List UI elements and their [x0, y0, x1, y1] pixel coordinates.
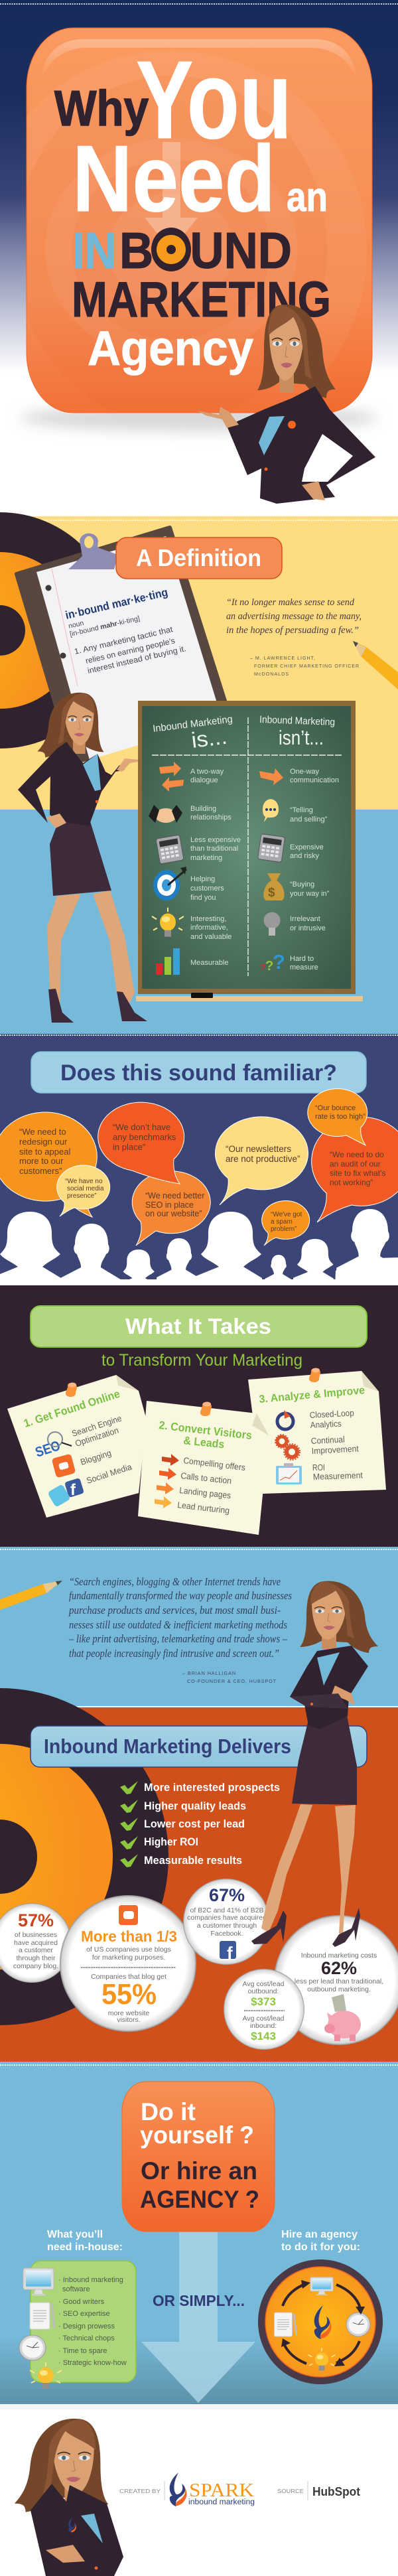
stat circle: more than 1/3 and 55%: for marketing purposes.	[92, 1954, 165, 1962]
attribution	[250, 655, 360, 677]
board list: inbound isn't: One-way	[290, 768, 320, 776]
heading: Does this sound familiar	[31, 1052, 366, 1093]
speech bubble: redesign	[0, 1112, 97, 1217]
speech bubble: benchmarks: any benchmarks	[113, 1132, 176, 1142]
note 1: get found online: Optimization	[74, 1425, 120, 1449]
heading: Does this sound familiar: Does this sound familiar?	[60, 1060, 337, 1086]
definition text: relies on earning people’s	[85, 636, 176, 666]
definition text: noun	[68, 619, 85, 630]
board list: inbound is: customers	[190, 885, 224, 893]
section: delivers background	[0, 1706, 398, 2062]
board list: inbound is: informative,	[190, 924, 228, 932]
board list: inbound isn't: “Telling	[290, 806, 313, 814]
stat circle: 62%: outbound marketing.	[307, 1985, 371, 1993]
title: Need	[72, 126, 275, 232]
character: presenter beside board	[18, 693, 147, 1023]
stat circle: 62%: less per lead than traditional,	[295, 1977, 383, 1985]
note 1: get found online: SEO	[33, 1438, 62, 1461]
decorative target	[0, 1688, 168, 2025]
benefit list: Higher ROI	[144, 1835, 198, 1848]
definition text	[64, 586, 187, 676]
board heading: isn't: isn’t...	[279, 726, 324, 749]
note 2: convert visitors and leads: Compelling offers	[183, 1455, 246, 1472]
stat circle: cost per lead	[224, 1969, 304, 2050]
note 3: analyze and improve: Closed-Loop	[309, 1408, 354, 1420]
board list: inbound isn't: “Buying	[290, 881, 314, 889]
icon: pencil	[353, 641, 398, 689]
heading: hire an agency: to do it for you:	[281, 2242, 360, 2253]
stat circle: cost per lead: Avg cost/lead	[243, 1980, 285, 1988]
benefit list	[120, 1781, 280, 1867]
note 3: analyze and improve: Improvement	[311, 1443, 359, 1456]
note 3: analyze and improve	[248, 1368, 386, 1494]
panel: orange title card	[27, 28, 373, 413]
credit: created by: inbound marketing	[188, 2498, 255, 2506]
speech bubble: redesign: redesign our	[19, 1137, 68, 1147]
note 2: convert visitors and leads: 2. Convert Visitors	[159, 1419, 253, 1442]
title: You	[136, 38, 292, 162]
speech bubble: better SEO: on our website”	[145, 1209, 202, 1218]
panel: do it yourself or hire: yourself ?	[140, 2121, 254, 2149]
quote: Lawrence Light: an advertising message to the many,	[226, 611, 362, 622]
note 1: get found online: f	[70, 1481, 76, 1499]
stat circle: cost per lead: inbound:	[250, 2022, 277, 2030]
board list: inbound is: Measurable	[190, 959, 228, 967]
note 2: convert visitors and leads: Lead nurturing	[177, 1500, 230, 1516]
stat circle: 62%: 62%	[321, 1958, 357, 1978]
speech bubble: audit	[312, 1117, 398, 1222]
stat circle: 67%: Facebook.	[210, 1930, 243, 1938]
definition text: in·bound mar·ke·ting	[64, 586, 169, 622]
note 1: get found online: Search Engine	[70, 1413, 123, 1439]
panel: do it yourself or hire: AGENCY ?	[140, 2186, 259, 2213]
board list: inbound is: Interesting,	[190, 915, 226, 923]
speech bubble: newsletters: are not productive”	[226, 1154, 300, 1164]
panel: in-house list: · Time to spare	[58, 2347, 107, 2355]
attribution: FORMER CHIEF MARKETING OFFICER	[254, 663, 360, 669]
board list: inbound is: and valuable	[190, 933, 232, 941]
credit: source: SOURCE	[277, 2488, 304, 2494]
title: MARKETING	[72, 271, 331, 327]
board heading: is: is...	[190, 724, 228, 752]
attribution: – BRIAN HALLIGAN	[182, 1670, 236, 1676]
stat circle: 67%: companies have acquired	[187, 1914, 267, 1922]
subheading: to Transform Your Marketing	[101, 1351, 302, 1370]
stat circle: more than 1/3 and 55%: visitors.	[117, 2016, 141, 2024]
speech bubble: no social media: presence”	[67, 1192, 96, 1200]
quote: Brian Halligan: nesses still use outdated & inefficient marketing methods	[69, 1618, 287, 1631]
attribution: – M. LAWRENCE LIGHT,	[250, 655, 316, 661]
stat circle: cost per lead: Avg cost/lead	[243, 2015, 285, 2023]
panel: in-house list: · Strategic know-how	[58, 2359, 127, 2367]
shadow under title card	[20, 405, 378, 431]
icons: right column: $	[268, 886, 275, 900]
board heading: is: Inbound Marketing	[152, 713, 233, 735]
speech bubble: audit: an audit of our	[330, 1159, 381, 1169]
text: or simply: OR SIMPLY...	[153, 2292, 245, 2309]
benefit list: Higher quality leads	[144, 1800, 246, 1812]
stat circle: 67%: 67%	[209, 1885, 245, 1905]
board list: inbound is	[190, 768, 241, 967]
note 1: get found online: 1. Get Found Online	[22, 1388, 121, 1430]
panel: do it yourself or hire: Or hire an	[141, 2157, 257, 2184]
speech bubble: better SEO: SEO in place	[145, 1200, 194, 1210]
section: what it takes background	[0, 1285, 398, 1547]
icons: right column: ?	[265, 959, 273, 973]
speech bubble: better SEO: “We need better	[145, 1191, 204, 1200]
chalkboard	[136, 701, 363, 1001]
benefit list: More interested prospects	[144, 1781, 280, 1794]
heading: What It Takes: What It Takes	[125, 1314, 271, 1338]
title: Agency	[88, 322, 253, 376]
board list: inbound isn't: Irrelevant	[290, 915, 320, 923]
board list: inbound is: A two-way	[190, 768, 224, 776]
speech bubble: benchmarks	[98, 1102, 184, 1184]
panel: in-house list: · Inbound marketing	[58, 2276, 123, 2284]
speech bubble: no social media: social media	[67, 1185, 104, 1192]
panel: in-house list: · Design prowess	[58, 2323, 115, 2330]
stat circle: more than 1/3 and 55%: more website	[108, 2009, 149, 2017]
title: an	[287, 175, 328, 220]
speech bubble: no social media	[57, 1165, 110, 1216]
speech bubble: redesign: more to our	[19, 1156, 64, 1166]
board heading: isn't	[259, 714, 335, 749]
quote: Brian Halligan: that people increasingly find intrusive and screen out.”	[69, 1647, 279, 1660]
title: BOUND	[119, 222, 292, 279]
speech bubble: redesign: site to appeal	[19, 1147, 70, 1157]
speech bubble: audit: “We need to do	[330, 1150, 384, 1159]
title: IN	[72, 222, 116, 279]
heading: A Definition: A Definition	[136, 544, 261, 571]
definition text: [in-bound mahr-ki-ting]	[69, 614, 141, 638]
board heading: is	[152, 713, 233, 752]
stat circle: 62%: Inbound marketing costs	[301, 1952, 377, 1960]
note 1: get found online: Blogging	[79, 1448, 113, 1467]
speech bubble: better SEO	[132, 1171, 210, 1246]
speech bubble: audit: not working”	[330, 1178, 373, 1187]
speech bubble: spam: problem”	[271, 1226, 297, 1233]
stat circle: 57%	[0, 1903, 72, 1983]
attribution	[182, 1670, 277, 1684]
stat circle: 67%: of B2C and 41% of B2B	[190, 1906, 263, 1914]
board list: inbound isn't: measure	[290, 964, 318, 971]
stat circle: 57%: through their	[17, 1954, 56, 1962]
speech bubble: newsletters: “Our newsletters	[226, 1144, 291, 1154]
speech bubble: bounce rate: rate is too high”	[315, 1113, 365, 1121]
speech bubble: redesign: customers”	[19, 1166, 62, 1176]
board list: inbound is: find you	[190, 894, 216, 902]
speech bubble: audit: site to fix what’s	[330, 1169, 385, 1178]
character: presenter with crossed arms	[251, 1581, 378, 1947]
panel: in-house list	[19, 2261, 136, 2389]
title: Why	[54, 80, 149, 136]
title	[54, 38, 331, 376]
stat circle: 67%: a customer through	[197, 1922, 257, 1930]
board list: inbound isn't: and risky	[290, 852, 320, 860]
board list: inbound isn't: your way in”	[290, 890, 330, 898]
stat circle: cost per lead: $373	[251, 1995, 276, 2008]
section: do it yourself background	[0, 2062, 398, 2404]
stat circle: more than 1/3 and 55%: More than 1/3	[81, 1928, 177, 1945]
panel: do it yourself or hire: Do it	[141, 2098, 196, 2125]
quote: Lawrence Light	[226, 597, 362, 636]
note 3: analyze and improve: ROI	[312, 1463, 325, 1472]
board heading: isn't: Inbound Marketing	[259, 714, 335, 728]
heading: in-house: What you’ll	[47, 2229, 103, 2240]
silhouettes: audience	[0, 1209, 398, 1288]
section: definition background	[0, 516, 398, 1034]
definition text: 1. Any marketing tactic that	[74, 624, 174, 656]
note 3: analyze and improve: Measurement	[313, 1470, 363, 1482]
section: footer background	[0, 2404, 398, 2576]
character: presenter in title	[197, 305, 375, 504]
icons: right column	[258, 768, 285, 973]
quote: Lawrence Light: “It no longer makes sense to send	[226, 597, 354, 608]
heading: in-house: need in-house:	[47, 2242, 123, 2253]
credit: created by: SPARK	[189, 2480, 254, 2501]
stat circle: cost per lead: outbound:	[248, 1987, 279, 1995]
credit: created by	[119, 2472, 255, 2506]
board list: inbound isn't: or intrusive	[290, 924, 326, 932]
credit: source	[277, 2480, 360, 2500]
quote: Brian Halligan: – like print advertising, telemarketing and trade shows –	[68, 1632, 288, 1645]
icon: target in the letter O	[151, 228, 191, 271]
icon: pencil	[0, 1581, 62, 1610]
benefit list: Lower cost per lead	[144, 1818, 245, 1830]
panel: in-house list: · SEO expertise	[58, 2310, 110, 2318]
panel: in-house list: · Technical chops	[58, 2334, 115, 2342]
note 1: get found online: Social Media	[85, 1461, 133, 1486]
stat circle: more than 1/3 and 55%: Companies that blog get	[91, 1973, 166, 1981]
heading: Inbound Marketing Delivers: Inbound Marketing Delivers	[44, 1735, 291, 1758]
quote: Brian Halligan: fundamentally transformed the way people and businesses	[69, 1589, 292, 1602]
stat circle: 57%: have acquired	[14, 1939, 58, 1947]
stat circle: 62%	[274, 1915, 398, 2045]
benefit list: Measurable results	[144, 1854, 242, 1867]
stat circle: more than 1/3 and 55%: of US companies use blogs	[86, 1946, 171, 1954]
panel: in-house list: software	[62, 2285, 90, 2293]
board list: inbound isn't: communication	[290, 776, 339, 784]
note 3: analyze and improve: Continual	[310, 1434, 345, 1446]
speech bubble: spam: a spam	[271, 1218, 293, 1226]
stat circle: 67%: f	[227, 1943, 233, 1963]
icons: left column	[149, 762, 186, 975]
stat circle: cost per lead: $143	[251, 2030, 276, 2042]
section: title background	[0, 0, 398, 518]
definition text: interest instead of buying it.	[87, 644, 187, 676]
attribution: McDONALDS	[254, 671, 289, 677]
attribution: CO-FOUNDER & CEO, HUBSPOT	[187, 1678, 277, 1684]
stat circle: 57%: company blog.	[13, 1962, 58, 1970]
clipboard	[17, 528, 229, 763]
note 1: get found online	[7, 1375, 147, 1518]
heading: A Definition	[116, 537, 282, 579]
section: does this sound familiar background	[0, 1034, 398, 1286]
note 2: convert visitors and leads: Calls to action	[180, 1470, 232, 1486]
board list: inbound isn't: Hard to	[290, 955, 314, 963]
board list: inbound is: marketing	[190, 854, 222, 862]
panel: do it yourself or hire	[122, 2082, 275, 2232]
speech bubble: spam: “We've got	[271, 1211, 302, 1218]
character: presenter in footer	[15, 2419, 123, 2576]
credit: created by: CREATED BY	[119, 2488, 161, 2494]
board list: inbound is: Building	[190, 805, 216, 813]
stat circle: more than 1/3 and 55%	[60, 1895, 196, 2032]
board list: inbound isn't: Expensive	[290, 843, 324, 851]
stat circle: more than 1/3 and 55%: 55%	[101, 1978, 157, 2011]
board list: inbound is: Less expensive	[190, 836, 241, 844]
icons: right column: ?	[260, 962, 265, 972]
speech bubble: redesign: “We need to	[19, 1127, 66, 1137]
heading: What It Takes	[31, 1306, 367, 1347]
icons: right column: ?	[273, 950, 285, 973]
speech bubble: no social media: “We have no	[65, 1178, 103, 1185]
quote: Brian Halligan: “Search engines, blogging & other Internet trends have	[69, 1575, 281, 1588]
quote: Brian Halligan	[68, 1575, 292, 1660]
speech bubble: spam	[262, 1201, 310, 1246]
speech bubble: benchmarks: “We don’t have	[113, 1122, 170, 1132]
heading: hire an agency: Hire an agency	[281, 2229, 358, 2240]
heading: in-house	[47, 2229, 123, 2253]
note 2: convert visitors and leads: Landing pages	[179, 1485, 232, 1500]
note 2: convert visitors and leads	[138, 1401, 269, 1535]
note 2: convert visitors and leads: & Leads	[183, 1434, 225, 1451]
speech bubble: newsletters	[216, 1117, 308, 1205]
note 3: analyze and improve: 3. Analyze & Improve	[259, 1384, 365, 1405]
board list: inbound isn't: and selling”	[290, 816, 328, 823]
note 3: analyze and improve: Analytics	[310, 1419, 342, 1430]
credit: source: HubSpot	[312, 2485, 360, 2498]
stat circle: 57%: of businesses	[15, 1931, 57, 1939]
panel: in-house list: · Good writers	[58, 2298, 105, 2306]
board list: inbound is: than traditional	[190, 845, 238, 853]
board list: inbound is: Helping	[190, 875, 215, 883]
section: quote background	[0, 1547, 398, 1707]
stat circle: 67%	[183, 1879, 269, 1965]
diagram: agency cycle	[258, 2259, 383, 2384]
speech bubble: benchmarks: in place”	[113, 1142, 145, 1152]
board list: inbound is: relationships	[190, 814, 232, 822]
stat circle: 57%: 57%	[18, 1910, 54, 1930]
quote: Brian Halligan: purchase products and services, but most small busi-	[68, 1604, 281, 1616]
heading: hire an agency	[281, 2229, 360, 2253]
arrow: down	[141, 2232, 255, 2403]
speech bubble: bounce rate	[308, 1089, 367, 1145]
speech bubble: bounce rate: “Our bounce	[315, 1104, 356, 1112]
quote: Lawrence Light: in the hopes of persuading a few.”	[226, 625, 359, 636]
stat circle: 57%: a customer	[19, 1946, 53, 1954]
board list: inbound is: dialogue	[190, 776, 218, 784]
heading: Inbound Marketing Delivers	[31, 1726, 367, 1767]
decorative target	[0, 512, 118, 749]
board list: inbound isn't	[290, 768, 339, 971]
